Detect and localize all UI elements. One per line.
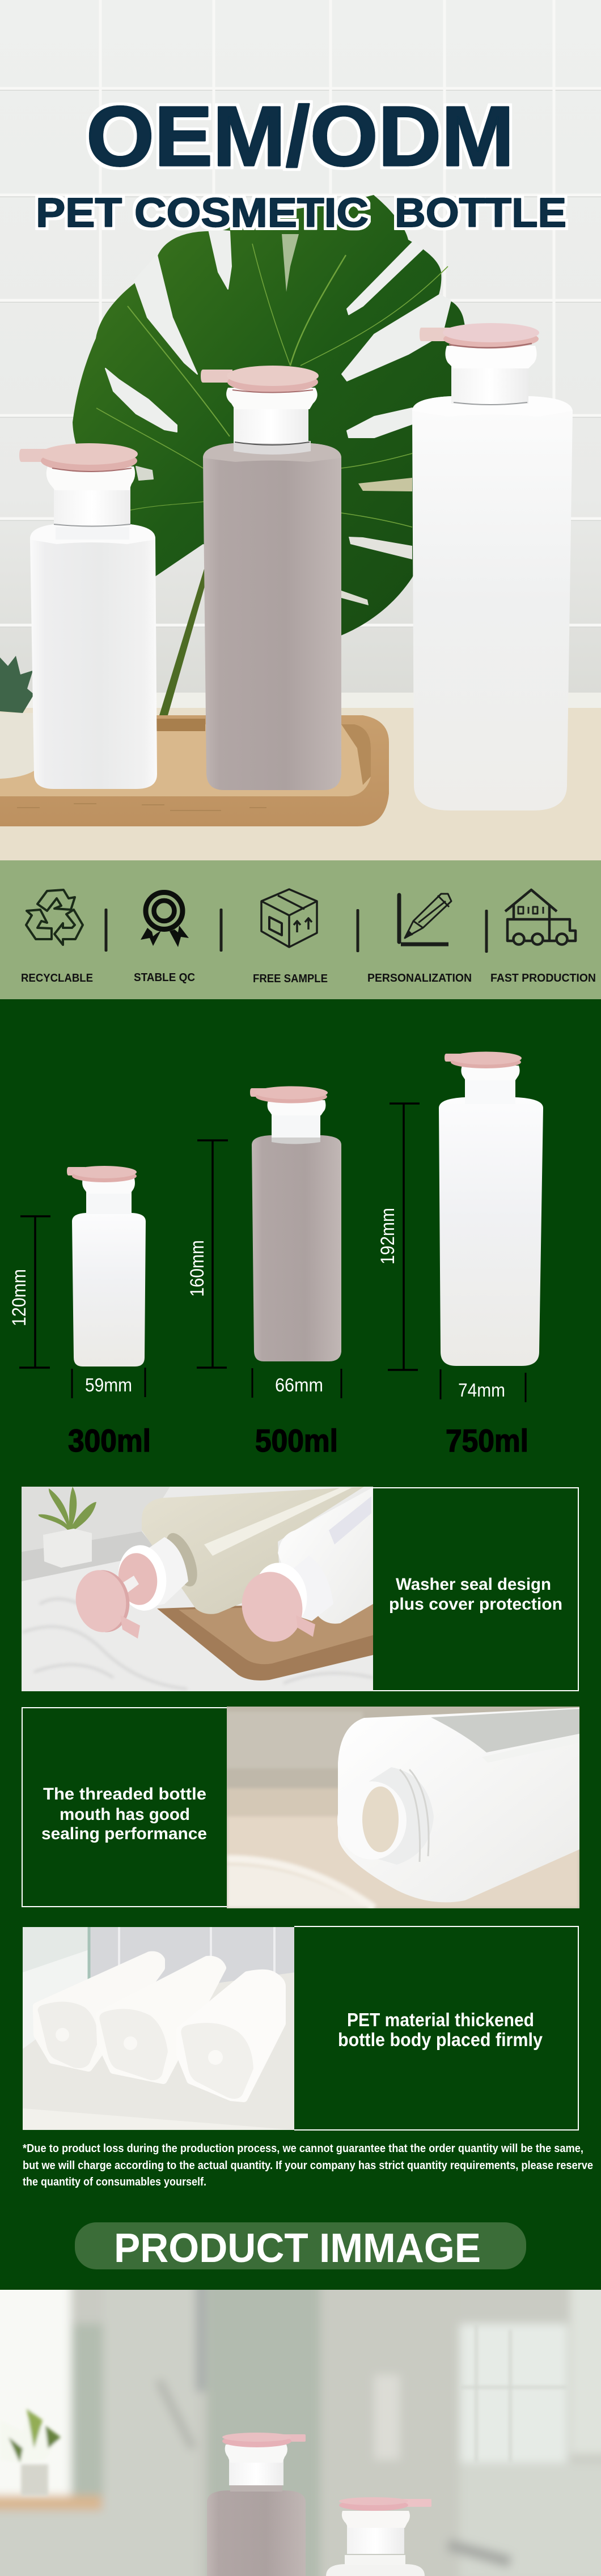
- subtitle: BOTTLE: BOTTLE: [395, 190, 566, 236]
- beige bottle: [142, 1487, 364, 1614]
- countertop: [0, 708, 601, 860]
- dimension: 59mm width: 59mm: [85, 1374, 132, 1395]
- dimension: 66mm width: 66mm: [275, 1374, 323, 1395]
- succulent in pot: [0, 656, 34, 779]
- feature band: [0, 860, 601, 999]
- caption: sealing performance: [41, 1824, 207, 1843]
- threaded neck: [363, 1767, 434, 1865]
- 750ml bottle: [439, 1052, 543, 1366]
- panel: washer seal: [22, 1487, 578, 1691]
- volume: 300ml: 300ml: [68, 1423, 151, 1458]
- text box: [294, 1926, 578, 2130]
- dimension: 120mm height: [9, 1216, 50, 1368]
- icon: medal: [141, 892, 189, 947]
- volume: 750ml: 750ml: [446, 1423, 528, 1458]
- dimension: 120mm height: 120mm: [9, 1269, 30, 1326]
- subtitle: PET COSMETIC: PET COSMETIC: [36, 190, 369, 236]
- 300ml bottle: [67, 1166, 146, 1366]
- icon: warehouse truck: [505, 890, 575, 944]
- photo: three bottles lying on shelf: [23, 1927, 295, 2130]
- bottle large white: [412, 323, 573, 810]
- bottle A: [37, 1955, 161, 2068]
- volume: 500ml: 500ml: [255, 1423, 338, 1458]
- caption: plus cover protection: [389, 1595, 562, 1614]
- caption: The threaded bottle: [43, 1785, 206, 1803]
- caption: Washer seal design: [396, 1575, 551, 1594]
- disclaimer note: the quantity of consumables yourself.: [23, 2176, 206, 2188]
- dimension: 160mm height: [187, 1140, 228, 1368]
- divider: [104, 909, 108, 952]
- text box: [373, 1488, 578, 1691]
- dimension: 192mm height: 192mm: [377, 1208, 399, 1264]
- text box: [22, 1708, 227, 1907]
- dimension: 192mm height: [377, 1104, 420, 1370]
- caption: [41, 1785, 207, 1843]
- caption: [389, 1575, 562, 1614]
- caption: mouth has good: [60, 1805, 190, 1824]
- blurred plant in vase: [0, 2409, 61, 2496]
- label: recyclable: RECYCLABLE: [21, 971, 93, 984]
- tiled wall: [0, 0, 601, 708]
- disclaimer note: [23, 2142, 593, 2188]
- small white bottle: [326, 2497, 431, 2576]
- dimension: 74mm width: 74mm: [458, 1380, 505, 1401]
- wooden tray: [0, 715, 389, 826]
- panel: thick body: [23, 1926, 578, 2130]
- bottle medium mauve: [201, 366, 341, 790]
- dimension: 66mm width: [252, 1368, 341, 1398]
- icon: parcel box: [261, 889, 317, 947]
- bottle B: [100, 1960, 222, 2080]
- window mullions: [460, 2324, 567, 2463]
- divider: [220, 909, 222, 952]
- monstera leaf: [73, 195, 467, 715]
- photo: threaded bottle mouth: [227, 1707, 579, 1908]
- blurred background: [0, 2278, 601, 2576]
- dimension: 160mm height: 160mm: [187, 1240, 208, 1297]
- divider: [485, 910, 488, 953]
- heading: product image pill: PRODUCT IMMAGE: [114, 2226, 481, 2271]
- bottle body: [338, 1708, 579, 1902]
- icon: pencil and ruler: [399, 894, 451, 944]
- bottle small white: [19, 443, 157, 789]
- divider: [356, 909, 359, 952]
- wooden tray: [157, 1601, 373, 1680]
- photo: pump caps on marble: [22, 1487, 373, 1691]
- first pump neck, washer and lid: [76, 1533, 197, 1639]
- dimension: 74mm width: [441, 1369, 526, 1402]
- label: fast production: FAST PRODUCTION: [490, 971, 596, 984]
- tall mauve bottle: [207, 2433, 306, 2576]
- caption: bottle body placed firmly: [338, 2029, 543, 2050]
- label: free sample: FREE SAMPLE: [253, 972, 328, 985]
- dimension: 59mm width: [72, 1368, 145, 1398]
- title: OEM/ODM: OEM/ODM: [86, 88, 514, 184]
- panel: threaded mouth: [22, 1707, 579, 1908]
- icon: recycle: [26, 890, 83, 945]
- product photo: bathroom scene: [0, 2278, 601, 2576]
- bottle C: [180, 1974, 282, 2098]
- second pump neck and lid: [242, 1563, 319, 1642]
- caption: PET material thickened: [347, 2009, 534, 2030]
- white bottle: [278, 1487, 373, 1624]
- label: stable qc: STABLE QC: [134, 971, 195, 984]
- plant: [39, 1487, 96, 1568]
- label: personalization: PERSONALIZATION: [367, 971, 472, 984]
- main title: [36, 88, 566, 236]
- size chart: [9, 1052, 543, 1458]
- caption: [338, 2009, 543, 2050]
- 500ml bottle: [250, 1086, 341, 1361]
- hero photo: bottles, leaf and tiled wall: [0, 0, 601, 860]
